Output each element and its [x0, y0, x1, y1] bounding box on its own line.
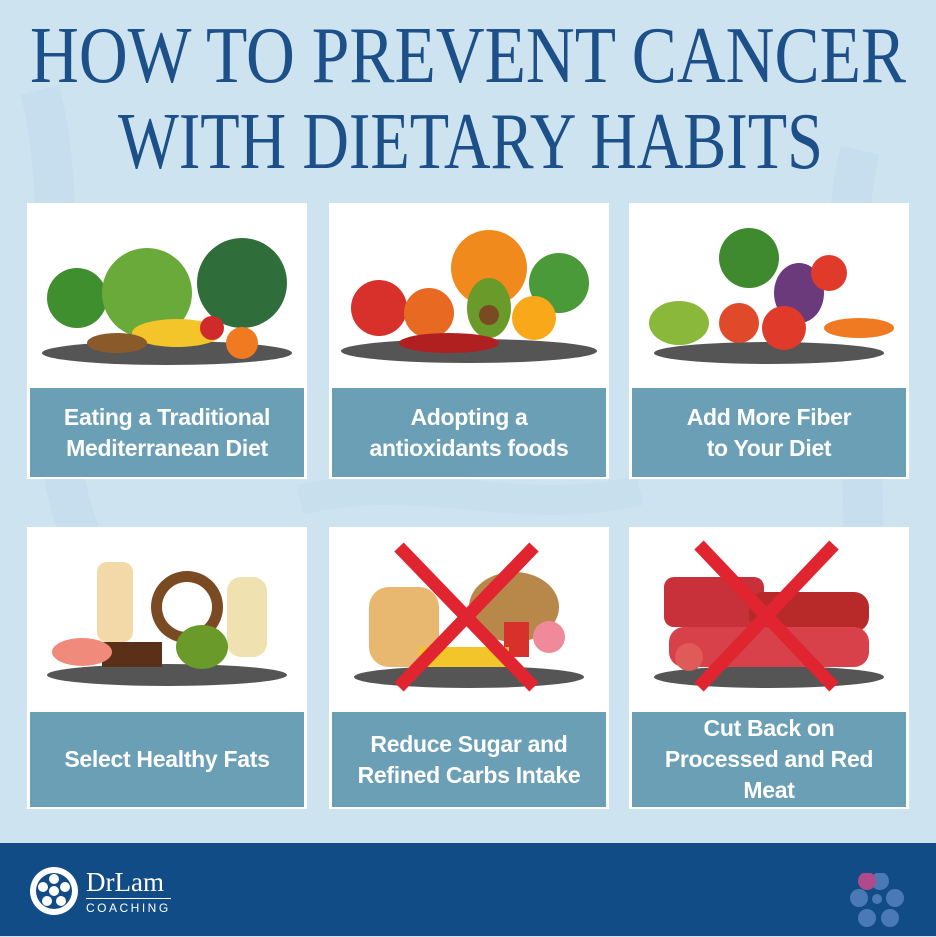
label: to Your Diet: [707, 434, 831, 460]
icon: flower logo: [850, 873, 904, 927]
logo: DrLam Coaching: DrLam: [86, 867, 164, 897]
label: [30, 712, 304, 807]
label: Processed and Red: [665, 746, 873, 772]
footer: [0, 843, 936, 936]
label: Add More Fiber: [687, 404, 851, 430]
icon: mediterranean foods: [42, 238, 292, 365]
label: Meat: [743, 777, 795, 803]
icon: fiber vegetables: [649, 228, 894, 364]
label: Select Healthy Fats: [64, 746, 270, 772]
label: [632, 388, 906, 477]
icon: healthy fats: [47, 562, 287, 686]
icon: red meat crossed out: [654, 540, 884, 692]
label: [30, 388, 304, 477]
label: [332, 388, 606, 477]
label: [632, 712, 906, 807]
label: antioxidants foods: [369, 434, 569, 460]
label: Eating a Traditional: [64, 404, 270, 430]
label: Reduce Sugar and: [370, 730, 568, 756]
label: Refined Carbs Intake: [358, 762, 580, 788]
title: [30, 12, 907, 186]
logo: DrLam Coaching: [30, 867, 171, 915]
card: processed meat: [629, 527, 909, 809]
icon: antioxidant foods: [341, 230, 597, 363]
label: [332, 712, 606, 807]
label: Cut Back on: [704, 715, 834, 741]
label: Mediterranean Diet: [66, 434, 268, 460]
card: antioxidants: [329, 203, 609, 479]
icon: sugar and carbs crossed out: [354, 542, 584, 692]
card: healthy fats: [27, 527, 307, 809]
card: mediterranean: [27, 203, 307, 479]
card: sugar carbs: [329, 527, 609, 809]
label: Adopting a: [410, 404, 528, 430]
card: fiber: [629, 203, 909, 479]
logo: DrLam Coaching: COACHING: [86, 901, 171, 915]
